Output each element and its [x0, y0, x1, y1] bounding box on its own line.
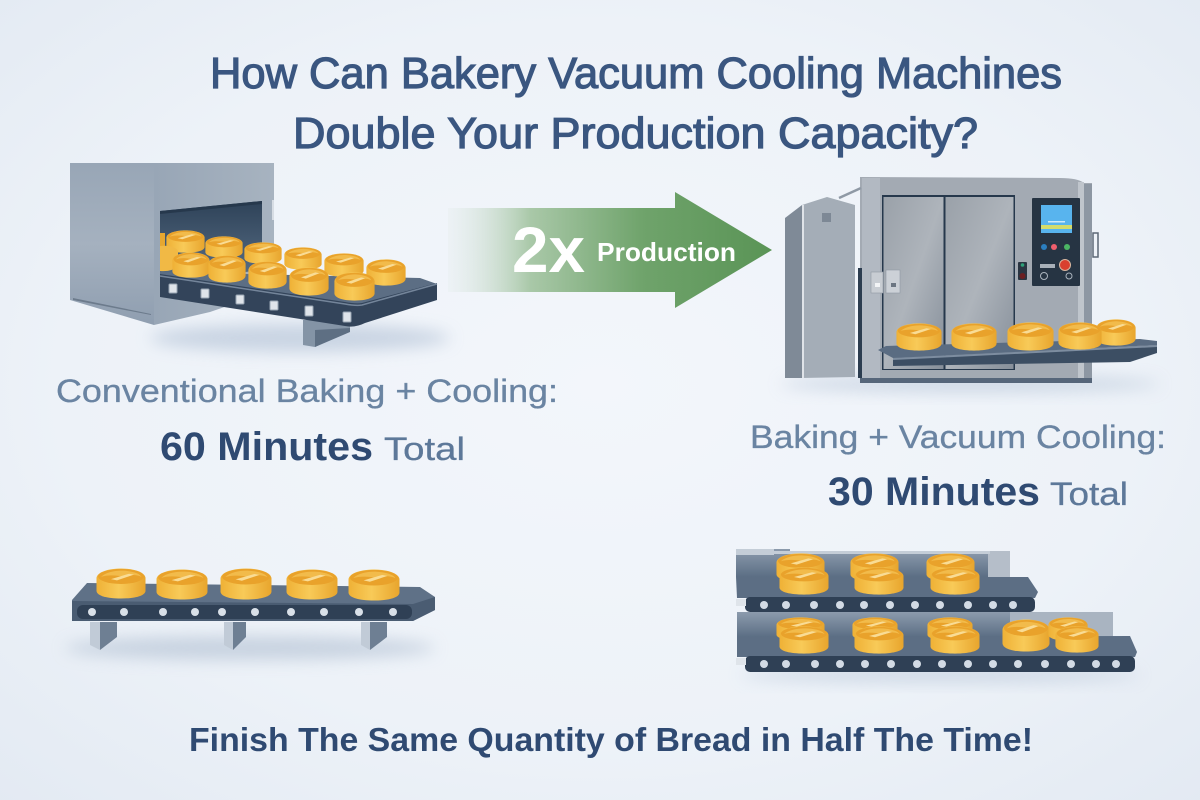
illustration: conventional oven with conveyor [70, 163, 450, 352]
arrow: 2x production: Production [597, 237, 736, 267]
label: vacuum cooling time: Baking + Vacuum Cooling: [750, 419, 1166, 455]
hinges [871, 270, 900, 293]
upper conveyor [736, 549, 1038, 612]
label: vacuum cooling time: 30 Minutes [828, 470, 1040, 514]
arrow: 2x production: 2x [512, 214, 585, 286]
title: Double Your Production Capacity? [293, 109, 978, 158]
breads on tray [896, 319, 1136, 351]
conveyor legs [90, 622, 387, 650]
label: conventional time [56, 373, 558, 469]
lower conveyor [736, 612, 1137, 672]
illustration: vacuum cooling machine [780, 177, 1160, 392]
side panel [785, 197, 855, 378]
arrow: 2x production [448, 192, 772, 308]
machine body [860, 177, 1092, 382]
tray [878, 339, 1157, 366]
label: vacuum cooling time [750, 419, 1166, 514]
control panel [1032, 198, 1080, 286]
switch box [1018, 262, 1027, 280]
breads on oven conveyor [160, 230, 406, 301]
label: conventional time: Total [384, 431, 465, 467]
label: conventional time: 60 Minutes [160, 425, 373, 469]
latch [1093, 233, 1098, 257]
closing message: Finish The Same Quantity of Bread in Half The Time! [189, 721, 1033, 758]
title: How Can Bakery Vacuum Cooling Machines [210, 49, 1062, 98]
title [210, 49, 1062, 158]
label: vacuum cooling time: Total [1050, 476, 1128, 512]
conveyor left [160, 272, 437, 347]
illustration: single conveyor [65, 568, 435, 660]
conveyor rollers [88, 608, 397, 616]
label: conventional time: Conventional Baking + Cooling: [56, 373, 558, 409]
breads [96, 568, 399, 601]
conveyor belt [72, 583, 435, 621]
illustration: double conveyor [736, 549, 1140, 682]
